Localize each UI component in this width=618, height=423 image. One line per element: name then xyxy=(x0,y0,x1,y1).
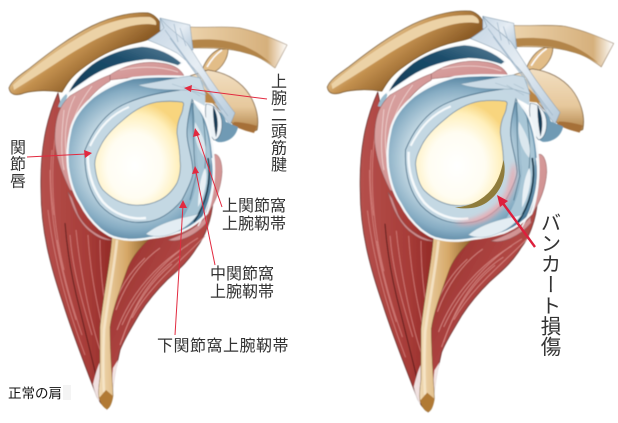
label: middle glenohumeral ligament xyxy=(210,265,274,301)
label: labrum: 関節唇 xyxy=(7,139,24,189)
label: biceps tendon: 上腕二頭筋腱 xyxy=(268,73,285,173)
label: inferior glenohumeral ligament: 下関節窩上腕靭帯 xyxy=(157,338,289,355)
caption: normal shoulder: 正常の肩 xyxy=(8,386,62,401)
arrow: biceps tendon xyxy=(184,85,267,99)
lesion: exposed bone rim xyxy=(455,160,505,208)
arrow: Bankart lesion xyxy=(497,195,535,247)
caption background xyxy=(63,385,71,400)
illustration: shoulder with Bankart lesion xyxy=(327,11,614,412)
label: superior glenohumeral ligament: 上腕靭帯 xyxy=(222,216,286,233)
label: Bankart lesion: バンカート損傷 xyxy=(537,212,560,357)
arrow: inferior glenohumeral ligament xyxy=(175,200,187,335)
arrow: middle glenohumeral ligament xyxy=(192,166,215,265)
label: superior glenohumeral ligament xyxy=(222,197,286,233)
label: middle glenohumeral ligament: 中関節窩 xyxy=(210,266,274,283)
illustration: normal shoulder anatomy xyxy=(9,13,287,409)
lesion: torn labrum glow xyxy=(454,162,516,225)
arrow: labrum xyxy=(27,150,92,158)
arrow: superior glenohumeral ligament xyxy=(193,128,222,207)
label: middle glenohumeral ligament: 上腕靭帯 xyxy=(210,284,274,301)
label: superior glenohumeral ligament: 上関節窩 xyxy=(222,198,286,215)
